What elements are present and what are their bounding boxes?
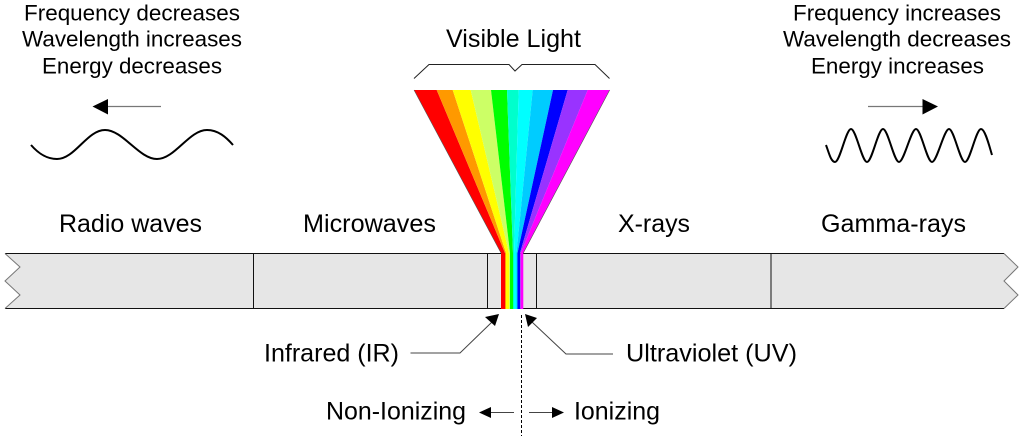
panel: high-frequency properties text: Frequency increases <box>793 0 1001 26</box>
heading: visible light: Visible Light <box>446 26 581 53</box>
label: x-rays: X-rays <box>618 211 690 238</box>
panel: high-frequency properties text <box>783 0 1011 78</box>
panel: high-frequency properties text: Energy increases <box>811 54 984 78</box>
label: ultraviolet: Ultraviolet (UV) <box>626 340 797 368</box>
label: radio waves: Radio waves <box>59 211 202 238</box>
arrow: non-ionizing direction <box>479 407 514 418</box>
label: microwaves: Microwaves <box>303 211 436 238</box>
arrow: pointing right <box>868 99 938 114</box>
icon: short wavelength wave <box>826 129 992 162</box>
visible light rainbow funnel <box>414 90 610 309</box>
panel: low-frequency properties text: Frequency decreases <box>24 0 240 26</box>
panel: low-frequency properties text: Energy decreases <box>42 54 222 78</box>
spectrum bar <box>5 254 1018 308</box>
callout arrow: ultraviolet <box>525 314 613 354</box>
arrow: pointing left <box>92 99 161 114</box>
label: gamma-rays: Gamma-rays <box>821 211 966 238</box>
callout arrow: infrared <box>410 314 499 353</box>
label: ionizing: Ionizing <box>574 398 660 426</box>
bracket: visible light range <box>414 64 610 78</box>
panel: low-frequency properties text <box>22 0 242 78</box>
icon: long wavelength wave <box>31 130 233 159</box>
label: non-ionizing: Non-Ionizing <box>326 398 466 426</box>
ionizing boundary dashed line <box>520 315 522 436</box>
label: infrared: Infrared (IR) <box>264 340 399 368</box>
panel: low-frequency properties text: Wavelength increases <box>22 26 242 52</box>
arrow: ionizing direction <box>529 407 564 418</box>
panel: high-frequency properties text: Wavelength decreases <box>783 26 1011 52</box>
